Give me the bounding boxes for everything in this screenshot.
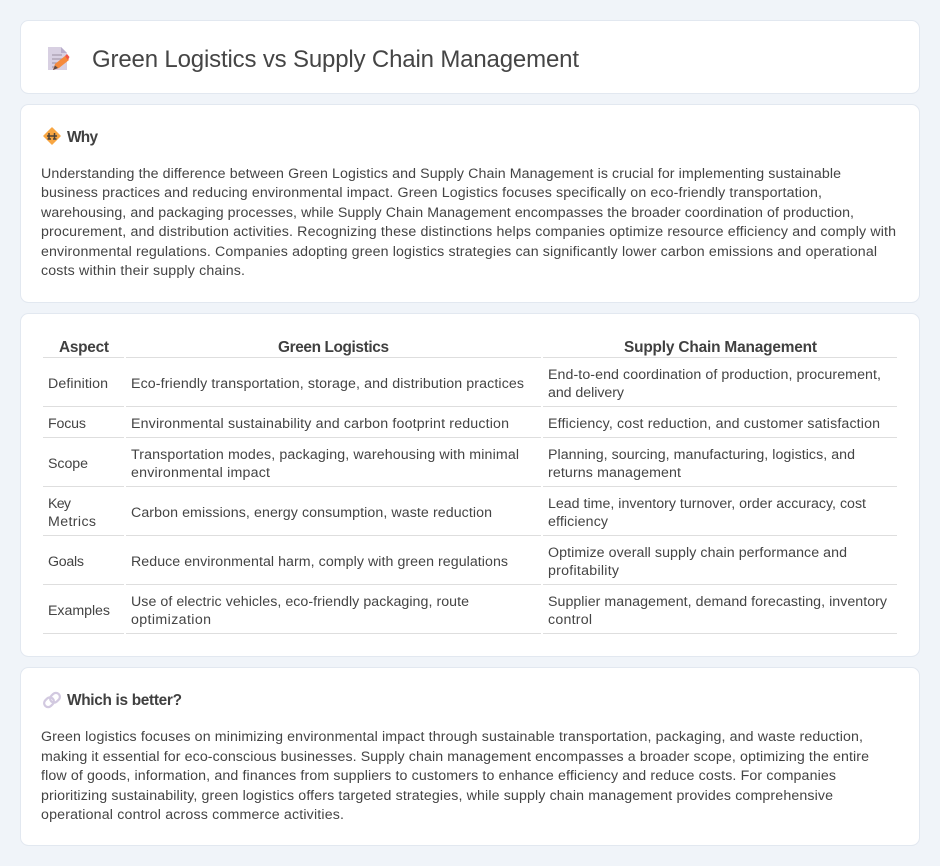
row: key metrics: Key (48, 496, 72, 512)
table header row: Aspect (59, 339, 109, 356)
row: key metrics: efficiency (548, 514, 609, 530)
row: goals: Optimize overall supply chain performance and (548, 545, 847, 561)
text block: why paragraph: business practices and reducing environmental impact. Green Logistics focuses specifically on eco-friendly transportation, (41, 185, 822, 201)
text block: which is better paragraph: Green logistics focuses on minimizing environmental impact through sustainable transportation, packaging, and waste reduction, (41, 729, 863, 745)
row: examples: optimization (131, 612, 211, 628)
row: examples: Examples (48, 603, 110, 619)
row: definition: End-to-end coordination of production, procurement, (548, 367, 881, 383)
icon: orange diamond sign (44, 128, 60, 144)
row: examples: control (548, 612, 592, 628)
row: scope: Transportation modes, packaging, warehousing with minimal (131, 447, 519, 463)
panel: comparison table (20, 314, 920, 656)
row: scope: Scope (48, 456, 88, 472)
panel: header (20, 20, 920, 94)
text block: why paragraph (40, 166, 896, 279)
row: examples: Use of electric vehicles, eco-friendly packaging, route (131, 594, 469, 610)
text block: why paragraph: warehousing, and packaging processes, while Supply Chain Management encompasses the broader coordination of production, (40, 205, 854, 221)
heading: which is better: Which is better? (67, 692, 182, 709)
row: examples: Supplier management, demand forecasting, inventory (548, 594, 888, 610)
table header row: Supply Chain Management (624, 339, 817, 356)
row: scope: returns management (548, 465, 681, 481)
row: definition: Eco-friendly transportation, storage, and distribution practices (131, 376, 524, 392)
row: key metrics (48, 496, 866, 530)
row: key metrics: Carbon emissions, energy consumption, waste reduction (131, 505, 492, 521)
row: definition: and delivery (548, 385, 625, 401)
row: key metrics: Metrics (48, 514, 96, 530)
row: focus: Focus (48, 416, 86, 432)
row: scope: Planning, sourcing, manufacturing, logistics, and (548, 447, 855, 463)
text block: which is better paragraph: prioritizing sustainability, green logistics offers targeted strategies, while supply chain management provides comprehensive (41, 788, 833, 804)
row: examples (48, 594, 888, 628)
row: goals: Goals (48, 554, 84, 570)
text block: which is better paragraph: flow of goods, information, and finances from suppliers to customers to enhance efficiency and reduce costs. For companies (41, 768, 836, 784)
table header row (59, 339, 817, 356)
text block: why paragraph: procurement, and distribution activities. Recognizing these distinctions helps companies optimize resource efficiency and comply with (41, 224, 896, 240)
row: goals: profitability (548, 563, 620, 579)
row: definition: Definition (48, 376, 108, 392)
text block: why paragraph: Understanding the difference between Green Logistics and Supply Chain Management is crucial for implementing sustainable (41, 166, 841, 182)
row: focus: Environmental sustainability and carbon footprint reduction (131, 416, 509, 432)
text block: which is better paragraph: operational control across commerce activities. (41, 807, 344, 823)
title: Green Logistics vs Supply Chain Management (92, 46, 579, 73)
text block: which is better paragraph (41, 729, 869, 823)
text block: which is better paragraph: making it essential for eco-conscious businesses. Supply chain management encompasses a broader scope, optimizing the entire (41, 749, 869, 765)
panel: which is better (20, 668, 920, 846)
row: key metrics: Lead time, inventory turnover, order accuracy, cost (548, 496, 866, 512)
heading: why: Why (67, 129, 98, 146)
table header row: Green Logistics (278, 339, 389, 356)
row: goals: Reduce environmental harm, comply with green regulations (131, 554, 508, 570)
row: scope (48, 447, 855, 481)
text block: why paragraph: costs within their supply chains. (41, 263, 245, 279)
icon: document with pencil (48, 47, 70, 70)
row: goals (48, 545, 847, 579)
icon: chain link (42, 691, 62, 709)
text block: why paragraph: environmental regulations. Companies adopting green logistics strategies can significantly lower carbon emissions and operational (41, 244, 877, 260)
row: definition (48, 367, 881, 401)
row: focus: Efficiency, cost reduction, and customer satisfaction (548, 416, 880, 432)
row: focus (48, 416, 880, 432)
row: scope: environmental impact (131, 465, 270, 481)
panel: why (20, 104, 920, 302)
